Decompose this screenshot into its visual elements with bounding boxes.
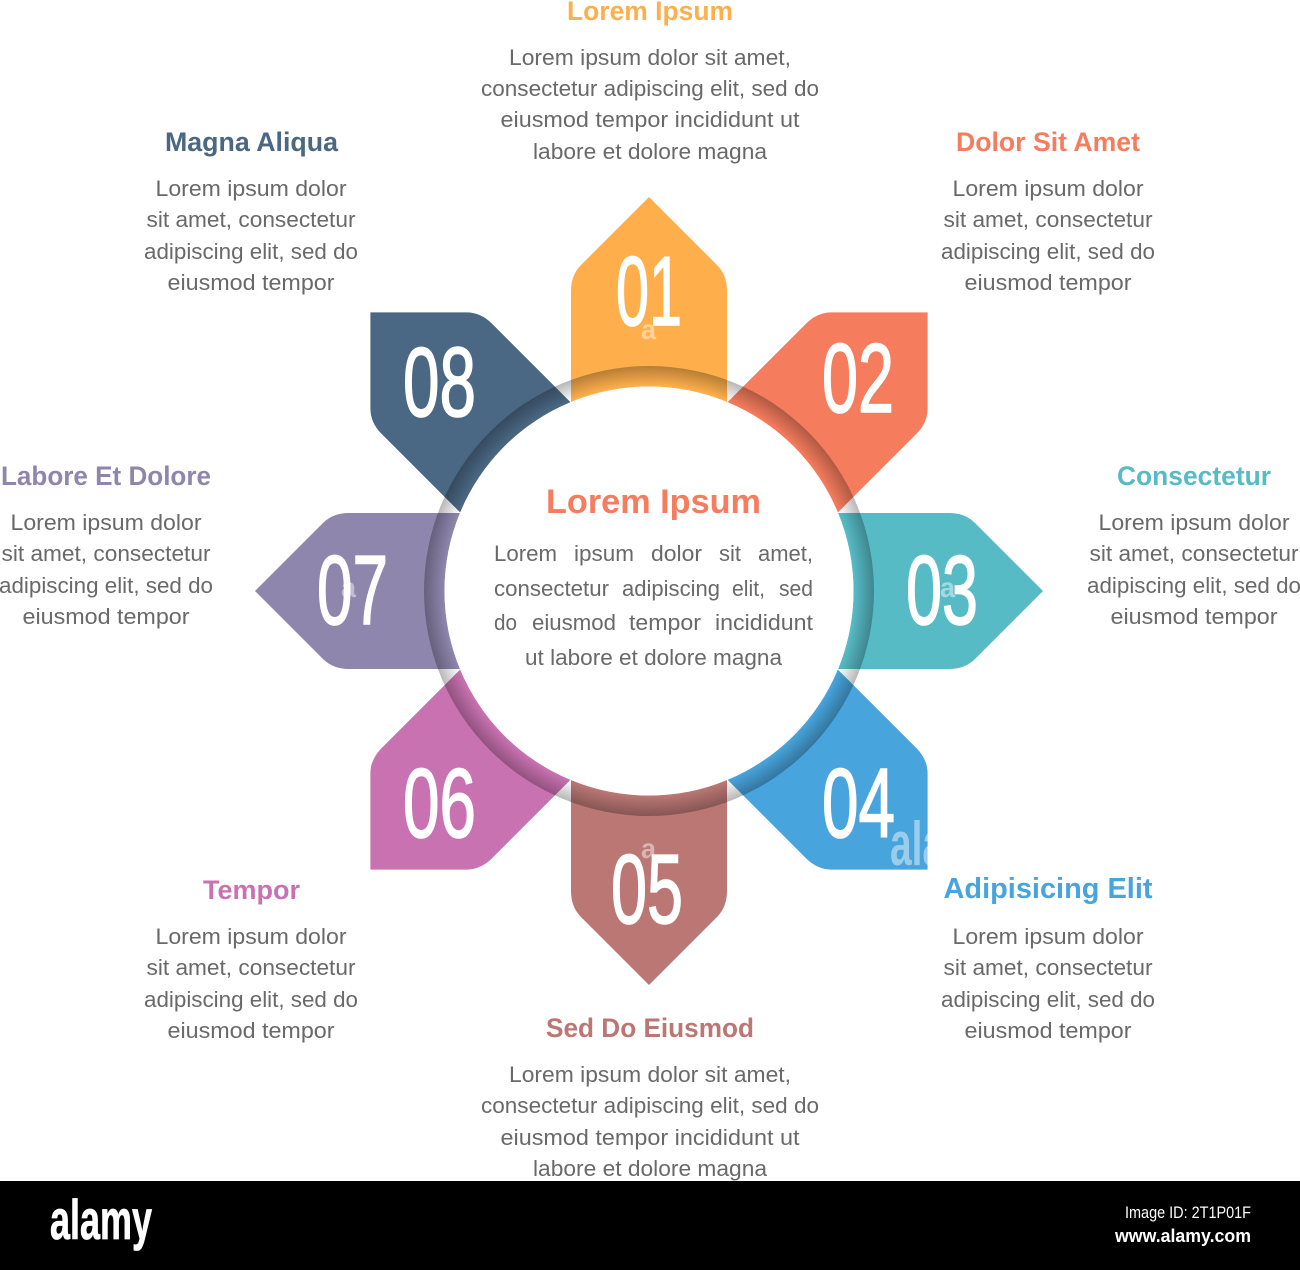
label 02: Dolor Sit Amet: eiusmod tempor [964, 270, 1132, 295]
label 08: Magna Aliqua: Lorem ipsum dolor [156, 176, 346, 201]
watermark fragments: a [341, 572, 356, 603]
centre text block [494, 483, 813, 670]
label 02: Dolor Sit Amet: adipiscing elit, sed do [941, 239, 1155, 264]
label 02: Dolor Sit Amet: sit amet, consectetur [944, 207, 1152, 232]
label 05: Sed Do Eiusmod: eiusmod tempor incididunt ut [500, 1125, 800, 1150]
label 01: Lorem Ipsum: Lorem ipsum dolor sit amet, [509, 45, 791, 70]
petal 08 [315, 257, 571, 513]
centre body text: adipiscing [622, 576, 720, 601]
label 04: Adipisicing Elit [941, 873, 1155, 1043]
label 03: Consectetur [1087, 461, 1300, 629]
label 03: Consectetur: eiusmod tempor [1110, 604, 1278, 629]
watermark fragments: a [940, 572, 955, 603]
centre body text: tempor [629, 610, 701, 635]
centre body text: consectetur [494, 576, 609, 601]
petal 05 [571, 780, 727, 985]
label 05: Sed Do Eiusmod: labore et dolore magna [533, 1156, 768, 1181]
label 03: Consectetur: Lorem ipsum dolor [1098, 510, 1290, 535]
label 03: Consectetur: adipiscing elit, sed do [1087, 573, 1300, 598]
label 01: Lorem Ipsum: eiusmod tempor incididunt ut [500, 107, 800, 132]
label 04: Adipisicing Elit: adipiscing elit, sed do [941, 987, 1155, 1012]
centre body text: do [494, 610, 517, 635]
watermark fragments: a [641, 314, 656, 345]
petal 06 [315, 669, 571, 925]
label 04: Adipisicing Elit: sit amet, consectetur [944, 955, 1152, 980]
centre body text: Lorem [494, 541, 557, 566]
centre white circle [444, 386, 854, 796]
label 05: Sed Do Eiusmod [481, 1013, 819, 1181]
centre body text: sed [779, 576, 813, 601]
label 05: Sed Do Eiusmod: Lorem ipsum dolor sit amet, [509, 1062, 791, 1087]
petal 04 [727, 669, 983, 925]
number 07: 07 [317, 535, 388, 645]
label 03: Consectetur: Consectetur [1117, 461, 1271, 491]
petal 07 [255, 513, 460, 669]
footer bar [0, 1181, 1300, 1270]
label 01: Lorem Ipsum: labore et dolore magna [533, 139, 768, 164]
petal 03 [838, 513, 1043, 669]
label 02: Dolor Sit Amet: Lorem ipsum dolor [952, 176, 1144, 201]
label 01: Lorem Ipsum: consectetur adipiscing elit, sed do [481, 76, 819, 101]
number 06: 06 [403, 748, 476, 858]
centre heading: Lorem Ipsum [546, 483, 761, 521]
image id: Image ID: 2T1P01F [1125, 1203, 1251, 1222]
label 07: Labore Et Dolore: eiusmod tempor [22, 604, 190, 629]
label 08: Magna Aliqua: eiusmod tempor [168, 270, 334, 295]
number 05: 05 [611, 834, 683, 944]
centre body text: ut labore et dolore magna [525, 645, 783, 670]
label 02: Dolor Sit Amet [941, 127, 1155, 295]
alamy logo: alamy [50, 1188, 152, 1251]
number 02: 02 [822, 323, 894, 433]
watermark fragments: ala [890, 810, 944, 879]
number 01: 01 [616, 236, 682, 346]
website: www.alamy.com [1114, 1226, 1251, 1246]
number 08: 08 [403, 327, 476, 437]
label 08: Magna Aliqua: adipiscing elit, sed do [144, 239, 358, 264]
label 08: Magna Aliqua [144, 127, 358, 295]
circular petal diagram [255, 197, 1043, 985]
label 06: Tempor [144, 875, 358, 1043]
centre body text: amet, [758, 541, 813, 566]
label 06: Tempor: Tempor [203, 875, 300, 905]
centre body text: sit [719, 541, 741, 566]
label 07: Labore Et Dolore: Lorem ipsum dolor [10, 510, 202, 535]
label 05: Sed Do Eiusmod: consectetur adipiscing elit, sed do [481, 1093, 819, 1118]
centre body text: incididunt [715, 610, 813, 635]
label 05: Sed Do Eiusmod: Sed Do Eiusmod [546, 1013, 754, 1043]
label 08: Magna Aliqua: sit amet, consectetur [146, 207, 356, 232]
watermark fragments: a [641, 833, 656, 864]
petal 02 [727, 257, 983, 513]
label 06: Tempor: adipiscing elit, sed do [144, 987, 358, 1012]
centre body text: ipsum [574, 541, 634, 566]
label 01: Lorem Ipsum [481, 0, 819, 164]
label 04: Adipisicing Elit: Adipisicing Elit [944, 873, 1153, 905]
centre body text [494, 541, 813, 670]
label 06: Tempor: sit amet, consectetur [146, 955, 356, 980]
watermark fragments [341, 314, 955, 879]
petal 01 [571, 197, 727, 402]
label 08: Magna Aliqua: Magna Aliqua [165, 127, 339, 157]
label 07: Labore Et Dolore [0, 461, 213, 629]
label 04: Adipisicing Elit: Lorem ipsum dolor [952, 924, 1144, 949]
label 03: Consectetur: sit amet, consectetur [1090, 541, 1298, 566]
label 02: Dolor Sit Amet: Dolor Sit Amet [956, 127, 1140, 157]
label 07: Labore Et Dolore: sit amet, consectetur [2, 541, 210, 566]
centre body text: dolor [651, 541, 702, 566]
number 04: 04 [822, 748, 895, 858]
number 03: 03 [906, 535, 978, 645]
label 06: Tempor: eiusmod tempor [168, 1018, 334, 1043]
shadow ring [424, 366, 874, 816]
label 04: Adipisicing Elit: eiusmod tempor [964, 1018, 1132, 1043]
centre body text: elit, [732, 576, 765, 601]
label 06: Tempor: Lorem ipsum dolor [156, 924, 346, 949]
centre body text: eiusmod [532, 610, 616, 635]
label 07: Labore Et Dolore: adipiscing elit, sed do [0, 573, 213, 598]
label 07: Labore Et Dolore: Labore Et Dolore [1, 461, 211, 491]
